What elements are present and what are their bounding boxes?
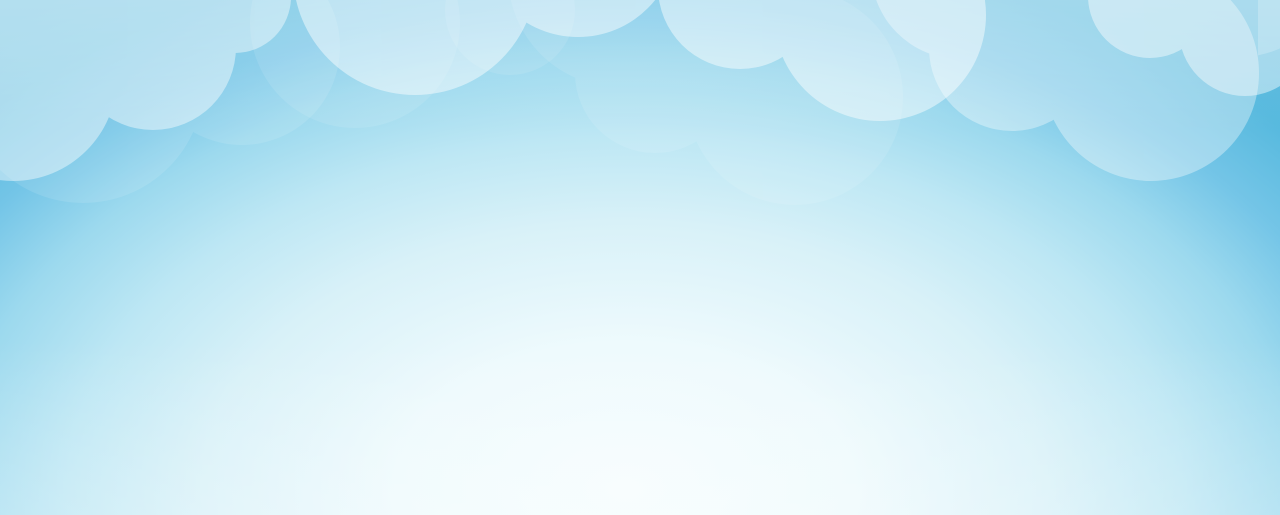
- front cloud centre left: [293, 0, 677, 95]
- middle cloud right: [871, 0, 1259, 181]
- front cloud left: [0, 0, 291, 181]
- back cloud left: [0, 0, 340, 203]
- back cloud small left: [250, 0, 460, 128]
- cloud corner highlight: [1258, 0, 1280, 56]
- back cloud centre: [508, 0, 903, 205]
- sky bottom glow: [0, 340, 1280, 515]
- front cloud top right: [1088, 0, 1280, 96]
- back cloud small centre: [445, 0, 575, 75]
- sky top glow: [0, 0, 1280, 130]
- front cloud centre right: [658, 0, 986, 121]
